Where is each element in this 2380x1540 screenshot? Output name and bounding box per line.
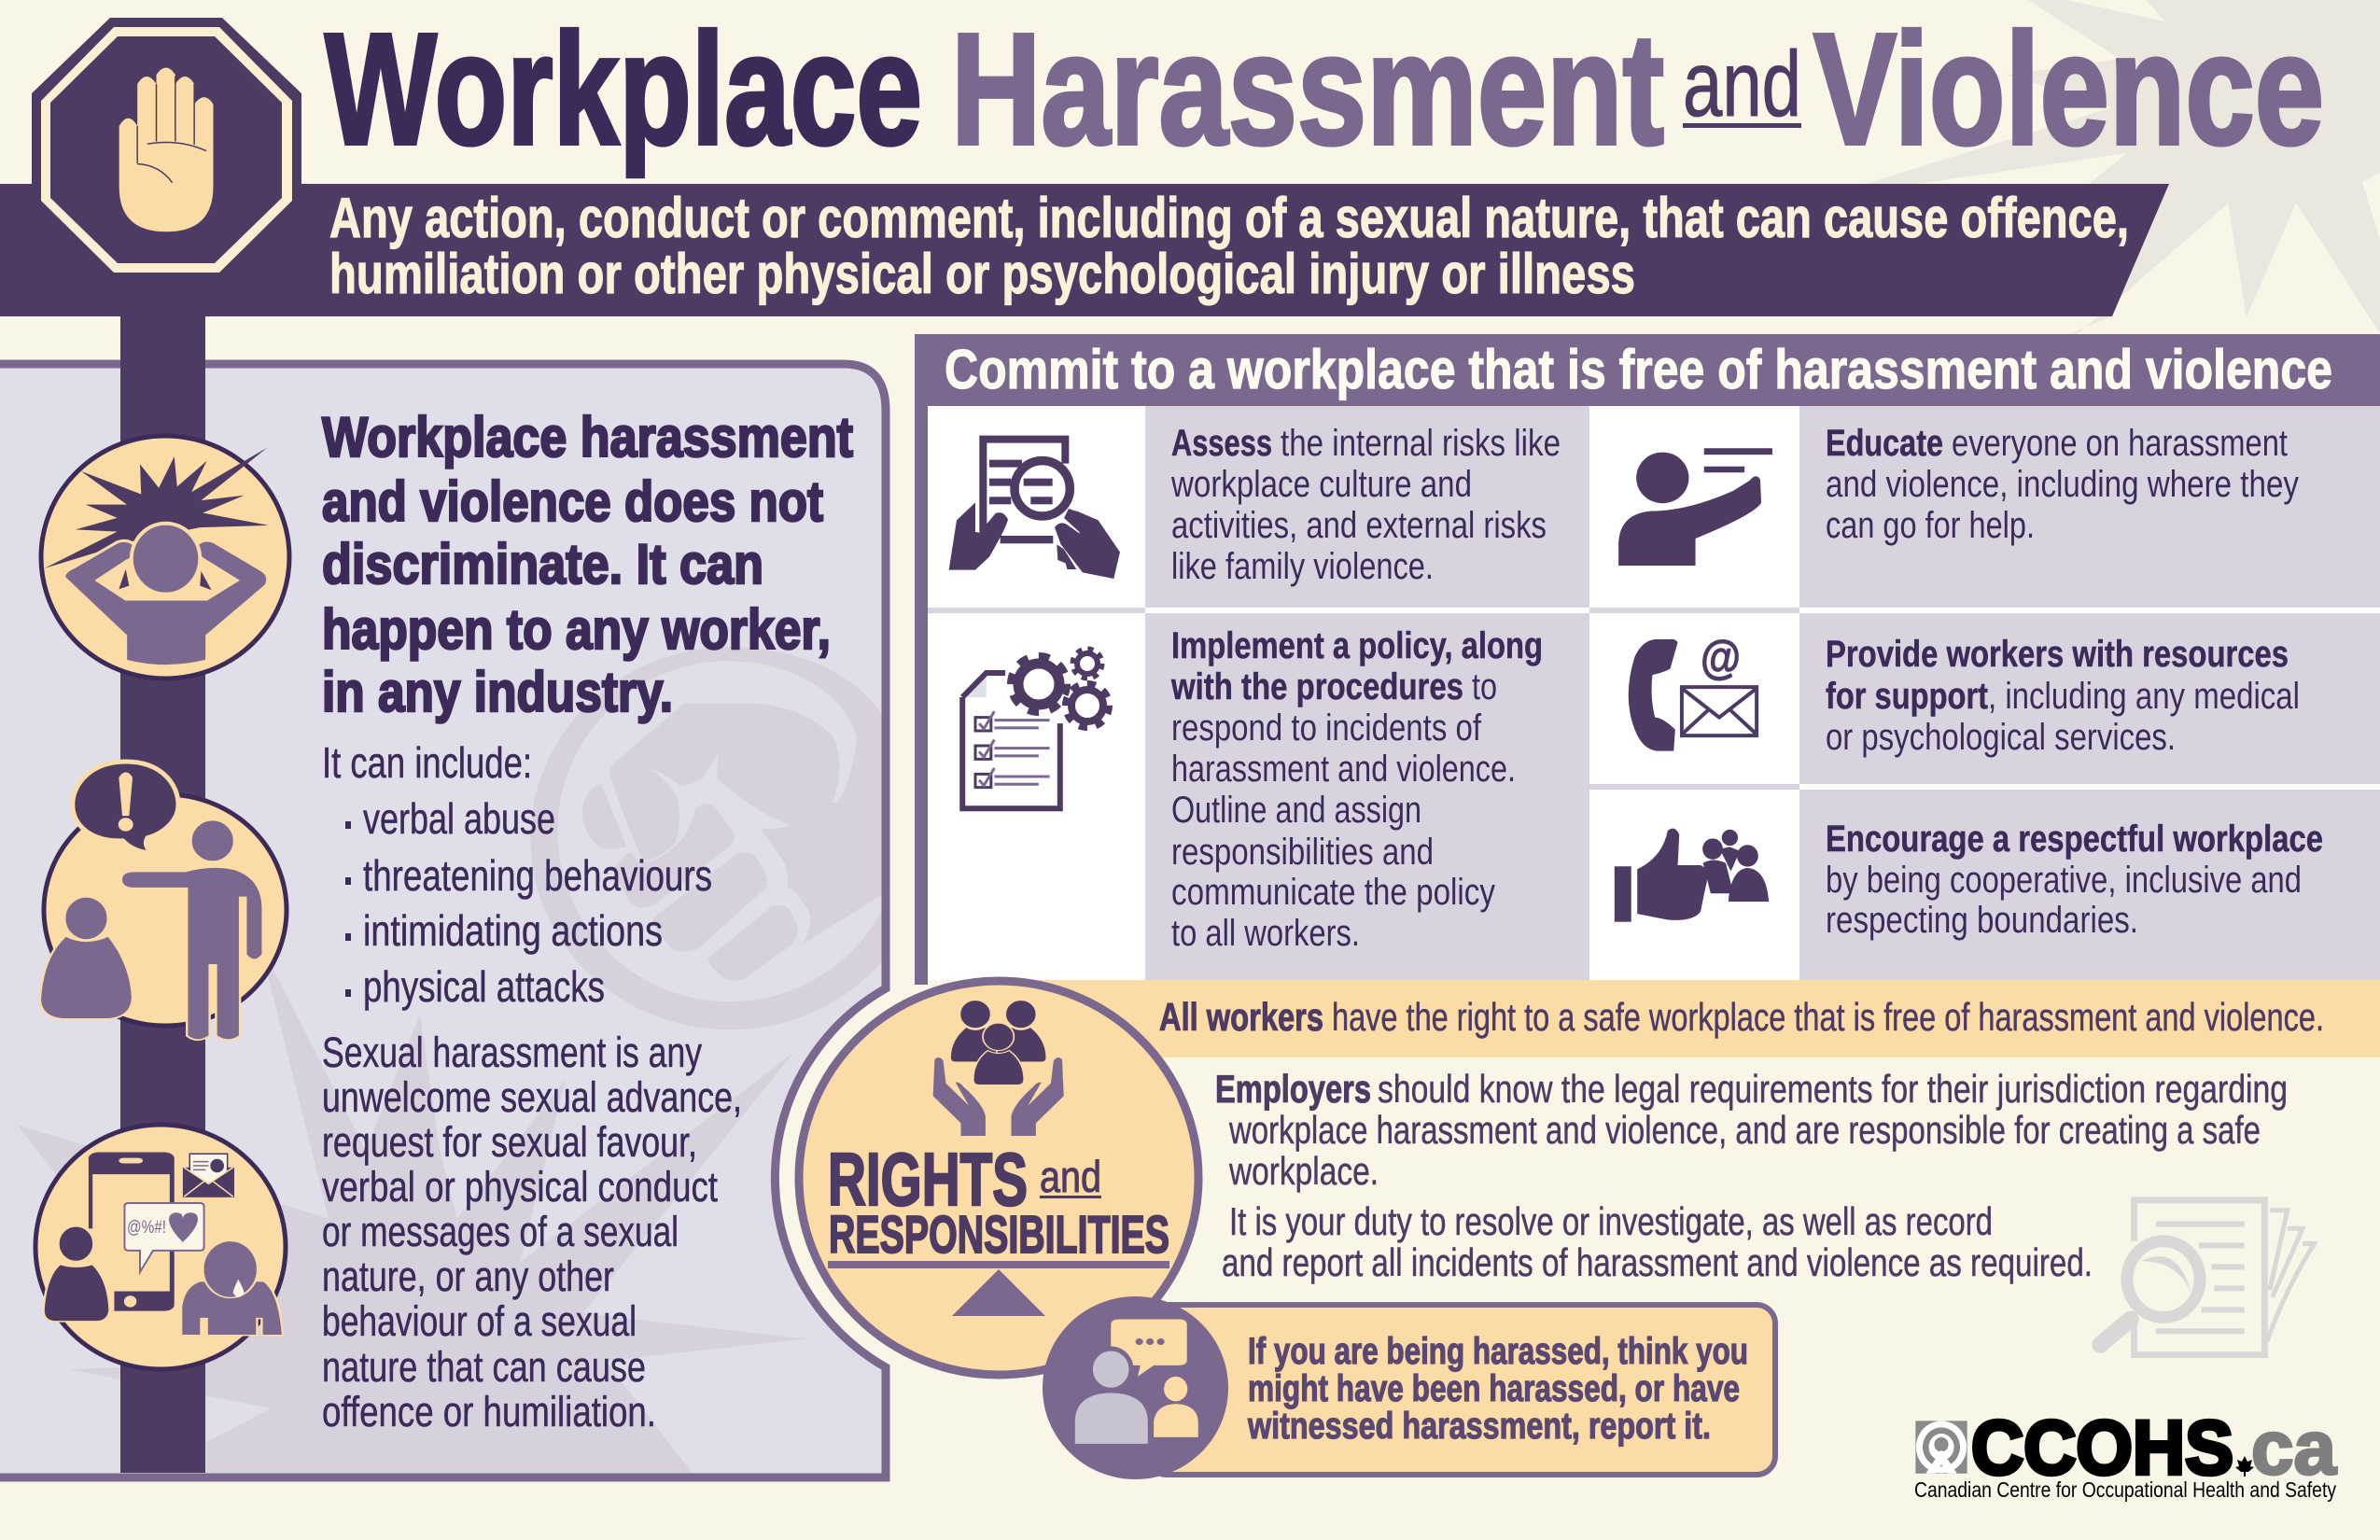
employers text: and report all incidents of harassment and violence as required. xyxy=(1222,1240,2093,1284)
callout: report harassment: might have been harassed, or have xyxy=(1248,1368,1740,1409)
table text: provide: Provide workers with resources xyxy=(1826,634,2289,675)
heading: RESPONSIBILITIES xyxy=(829,1205,1169,1265)
logo: CCOHS: CCOHS xyxy=(1971,1406,2233,1491)
panel: left description panel xyxy=(0,360,929,1483)
table text: educate: everyone on harassment xyxy=(1952,423,2288,464)
table text: implement: communicate the policy xyxy=(1171,872,1495,913)
heading xyxy=(828,1138,1169,1265)
sexual harassment paragraph: nature, or any other xyxy=(322,1253,614,1300)
left panel heading: discriminate. It can xyxy=(322,533,763,595)
icon: people talking circle xyxy=(1043,1296,1228,1479)
sexual harassment paragraph: or messages of a sexual xyxy=(322,1208,679,1255)
table text: implement: Outline and assign xyxy=(1171,790,1421,831)
table text: provide xyxy=(1826,634,2300,758)
table text: implement: to all workers. xyxy=(1171,913,1360,954)
left panel heading: Workplace harassment xyxy=(322,406,853,469)
table text: implement: harassment and violence. xyxy=(1171,749,1516,790)
employers text xyxy=(1215,1067,2288,1284)
speech bubble with exclamation xyxy=(73,762,178,853)
table text: implement: responsibilities and xyxy=(1171,832,1434,873)
list of behaviours xyxy=(322,738,712,1011)
icon: document and magnifier held in hands xyxy=(949,440,1120,579)
list of behaviours: It can include: xyxy=(322,738,532,787)
decorative starburst top right xyxy=(1866,0,2380,334)
icon: checklist and gears xyxy=(962,649,1109,808)
title xyxy=(325,1,2324,178)
title: Harassment xyxy=(951,1,1664,178)
table text: assess: workplace culture and xyxy=(1170,464,1472,505)
left panel heading: and violence does not xyxy=(322,470,823,533)
sexual harassment paragraph: Sexual harassment is any xyxy=(322,1029,702,1076)
table text: educate: can go for help. xyxy=(1826,505,2035,546)
pointing person xyxy=(121,820,263,1040)
dark person xyxy=(44,1226,110,1322)
icon: online harassment circle: @%#! xyxy=(127,1218,166,1238)
list of behaviours: threatening behaviours xyxy=(363,851,712,900)
left panel heading xyxy=(322,406,853,723)
sign post xyxy=(120,316,205,1473)
table text: assess xyxy=(1170,423,1561,587)
logo mark xyxy=(1915,1421,1967,1474)
employers text: It is your duty to resolve or investigate, as well as record xyxy=(1229,1199,1993,1243)
table text: educate xyxy=(1826,423,2299,546)
sexual harassment paragraph: behaviour of a sexual xyxy=(322,1297,637,1345)
peach banner: all workers: All workers xyxy=(1159,995,1323,1039)
left panel heading: in any industry. xyxy=(322,661,673,723)
table text: implement: with the procedures xyxy=(1170,666,1463,707)
table text: implement xyxy=(1170,625,1543,954)
definition text: humiliation or other physical or psychological injury or illness xyxy=(329,243,1635,305)
message bubble xyxy=(124,1203,204,1272)
table text: implement: Implement a policy, along xyxy=(1171,625,1543,666)
icon: online harassment circle xyxy=(35,1125,286,1369)
table text: assess: like family violence. xyxy=(1171,546,1434,587)
heading: and xyxy=(1040,1152,1101,1201)
crying person xyxy=(181,1240,283,1336)
table text: educate: and violence, including where they xyxy=(1826,464,2299,505)
table text: provide: , including any medical xyxy=(1988,676,2300,717)
table text: assess: activities, and external risks xyxy=(1171,505,1547,546)
table text: encourage xyxy=(1826,819,2323,941)
left panel heading: happen to any worker, xyxy=(322,598,831,661)
watermark: document and magnifier xyxy=(2100,1200,2315,1355)
sexual harassment paragraph: request for sexual favour, xyxy=(322,1118,697,1166)
callout: report harassment: If you are being harassed, think you xyxy=(1248,1331,1748,1372)
table text: provide: for support xyxy=(1826,676,1988,717)
definition text xyxy=(329,187,2129,305)
table text: educate: Educate xyxy=(1826,423,1943,464)
list of behaviours: intimidating actions xyxy=(363,906,663,955)
phone xyxy=(89,1152,175,1311)
table text: encourage: respecting boundaries. xyxy=(1826,900,2138,941)
list of behaviours: verbal abuse xyxy=(363,794,555,843)
icon: phone and email: @ xyxy=(1701,631,1741,683)
table text: provide: or psychological services. xyxy=(1826,717,2176,758)
icon: verbal threat circle xyxy=(40,762,287,1040)
table text: assess: Assess xyxy=(1171,423,1272,464)
table text: assess: the internal risks like xyxy=(1281,423,1561,464)
table text: implement: to xyxy=(1472,666,1497,707)
icon: headache person circle xyxy=(41,436,289,679)
icon: hands holding people xyxy=(933,1001,1064,1136)
employers text: workplace. xyxy=(1228,1149,1379,1193)
sexual harassment paragraph: offence or humiliation. xyxy=(322,1388,656,1435)
victim person xyxy=(40,897,133,1019)
table text: implement: respond to incidents of xyxy=(1171,707,1482,749)
icon: phone and email xyxy=(1629,631,1757,751)
watermark: starburst xyxy=(17,944,805,1483)
heading: RIGHTS xyxy=(828,1138,1028,1221)
employers text: Employers xyxy=(1215,1067,1371,1111)
header band xyxy=(0,184,2169,316)
balance beam xyxy=(828,1261,1169,1268)
balance triangle xyxy=(952,1269,1045,1316)
maple leaf xyxy=(2235,1456,2254,1477)
logo: CCOHS: ca xyxy=(2251,1406,2337,1491)
icon: stop sign with raised hand xyxy=(32,18,301,282)
sexual harassment paragraph xyxy=(322,1029,742,1435)
logo: CCOHS xyxy=(1914,1406,2337,1502)
rights and responsibilities circle xyxy=(799,981,1198,1375)
icon: person pointing to board xyxy=(1618,448,1772,566)
watermark: fist in ring xyxy=(530,648,881,1029)
panel: commit table xyxy=(915,334,2380,985)
sexual harassment paragraph: verbal or physical conduct xyxy=(322,1163,718,1211)
title: Workplace xyxy=(325,1,922,178)
list of behaviours: physical attacks xyxy=(363,962,605,1011)
icon: thumbs up and group xyxy=(1615,829,1769,922)
callout: report harassment xyxy=(1148,1305,1775,1475)
peach banner: all workers xyxy=(1027,980,2380,1057)
title: and xyxy=(1683,32,1801,135)
callout: report harassment: witnessed harassment, report it. xyxy=(1247,1406,1711,1447)
sexual harassment paragraph: unwelcome sexual advance, xyxy=(322,1073,742,1121)
envelope xyxy=(183,1154,234,1197)
sexual harassment paragraph: nature that can cause xyxy=(322,1343,646,1391)
